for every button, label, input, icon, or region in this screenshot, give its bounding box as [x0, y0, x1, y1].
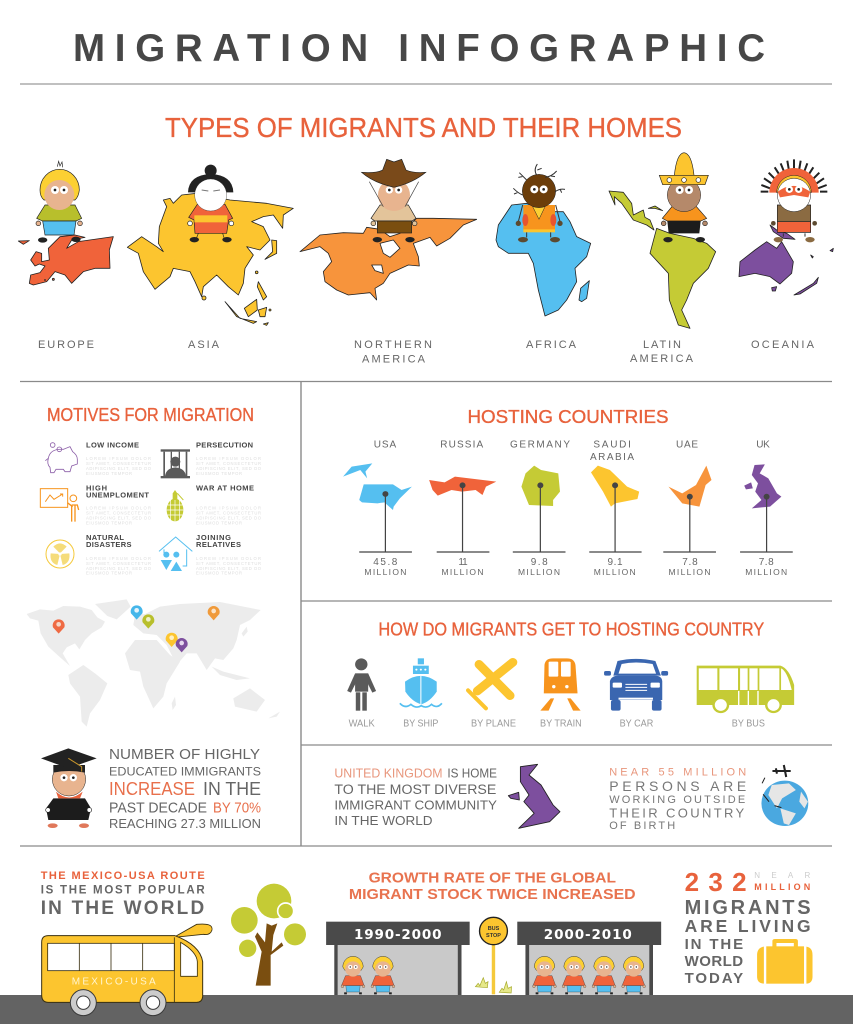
transport labels: BY SHIP: [403, 719, 439, 730]
continent labels: AFRICA: [526, 339, 577, 351]
text: high unemployment: ADIPISCING ELIT, SED DO: [86, 516, 152, 520]
heading: growth rate: [349, 869, 636, 903]
text: migrants living: [685, 897, 811, 987]
continent labels: EUROPE: [38, 339, 94, 351]
values: MILLION: [364, 567, 406, 577]
country labels: [374, 440, 770, 463]
text: low income: [86, 441, 152, 476]
text: joining relatives: EIUSMOD TEMPOR: [196, 570, 242, 576]
icon: train: [540, 658, 581, 711]
icon: unemployment chart: [40, 489, 79, 522]
character: Asian woman: [188, 165, 234, 242]
text: joining relatives: RELATIVES: [196, 540, 241, 549]
icon: grenade: [167, 490, 183, 521]
text: 55 million: PERSONS ARE: [609, 778, 746, 794]
continent labels: AMERICA: [630, 353, 694, 365]
panel: how migrants travel: [347, 620, 794, 730]
heading: growth rate: GROWTH RATE OF THE GLOBAL: [369, 869, 616, 886]
map: Africa: [496, 203, 591, 316]
text: UK diverse community: IN THE WORLD: [334, 813, 433, 828]
transport labels: WALK: [349, 719, 375, 730]
text: natural disasters: LOREM IPSUM DOLOR: [86, 556, 151, 561]
text: UK diverse community: UNITED KINGDOM: [334, 765, 443, 780]
world map: [27, 599, 280, 727]
heading: types of migrants: TYPES OF MIGRANTS AND THEIR HOMES: [165, 112, 682, 143]
Russia map: [429, 477, 496, 496]
text: route: IN THE WORLD: [41, 898, 204, 919]
text: joining relatives: ADIPISCING ELIT, SED DO: [196, 566, 262, 571]
country labels: UAE: [676, 440, 698, 451]
text: low income: LOW INCOME: [86, 441, 139, 450]
text: 55 million: [609, 767, 746, 832]
shelter labels: [354, 927, 632, 943]
text: highly educated: EDUCATED IMMIGRANTS: [109, 764, 261, 778]
country labels: SAUDI: [593, 440, 631, 451]
character: African man: [513, 164, 565, 242]
text: migrants living: TODAY: [685, 970, 743, 987]
USA map: [343, 463, 412, 510]
values: 7.8: [682, 557, 698, 568]
panel: 232 million: [685, 867, 813, 987]
panel: types of migrants: [18, 112, 833, 366]
map: Northern America: [300, 218, 477, 300]
panel: motives for migration: [40, 404, 262, 576]
shelter labels: 1990-2000: [354, 927, 442, 943]
transport labels: BY PLANE: [471, 719, 516, 730]
number: 232: 232: [685, 867, 747, 897]
text: persecution: ADIPISCING ELIT, SED DO: [196, 466, 262, 471]
map: Oceania: [739, 225, 833, 295]
text: persecution: PERSECUTION: [196, 441, 253, 450]
text: persecution: [196, 441, 262, 476]
text: natural disasters: [86, 533, 152, 576]
heading: hosting countries: HOSTING COUNTRIES: [468, 406, 668, 427]
character: graduate: [41, 748, 97, 828]
icon: ship: [400, 658, 442, 707]
map: Latin America: [609, 191, 716, 328]
country labels: USA: [374, 440, 397, 451]
text: near million: MILLION: [754, 882, 810, 892]
text: route: [41, 870, 205, 919]
values: 45.8: [373, 557, 398, 568]
character: cowboy: [362, 159, 426, 242]
shelter labels: 2000-2010: [544, 927, 632, 943]
text: 55 million: WORKING OUTSIDE: [609, 794, 745, 806]
country labels: GERMANY: [510, 440, 570, 451]
bus stop text: STOP: [486, 933, 501, 939]
icon: bus: [697, 666, 794, 712]
Germany map: [521, 466, 560, 506]
bus shelter 2000-2010: [517, 922, 661, 995]
country maps and stems: [343, 463, 793, 552]
icon: suitcase: [757, 939, 813, 984]
values: MILLION: [442, 567, 484, 577]
values: MILLION: [668, 567, 710, 577]
text: war at home: EIUSMOD TEMPOR: [196, 520, 242, 526]
text: war at home: LOREM IPSUM DOLOR: [196, 506, 261, 510]
bus text: MEXICO-USA: [72, 976, 156, 987]
text: highly educated: [109, 746, 261, 831]
values: 7.8: [759, 557, 774, 568]
icon: biohazard: [46, 540, 74, 568]
Saudi Arabia map: [591, 466, 639, 507]
bus stop text: BUS: [488, 926, 500, 932]
text: joining relatives: LOREM IPSUM DOLOR: [196, 556, 261, 561]
UK map: [744, 464, 781, 508]
values: 11: [458, 557, 468, 568]
icon: persecution: [161, 449, 190, 478]
continent labels: LATIN: [643, 339, 681, 351]
heading: transport: HOW DO MIGRANTS GET TO HOSTING COUNTRY: [378, 620, 764, 640]
continent labels: ASIA: [188, 339, 220, 351]
icon: joining relatives house: [159, 537, 192, 571]
heading: motives: MOTIVES FOR MIGRATION: [47, 404, 254, 425]
text: joining relatives: SIT AMET, CONSECTETUR: [196, 561, 261, 566]
text: highly educated: REACHING 27.3 MILLION: [109, 816, 261, 831]
text: near million: [754, 871, 811, 892]
character: Europe boy: [36, 161, 82, 243]
text: persecution: EIUSMOD TEMPOR: [196, 471, 242, 476]
road: [0, 995, 853, 1024]
icon: plane: [468, 662, 513, 708]
text: high unemployment: HIGH: [86, 484, 107, 493]
panel: Mexico-USA route: [41, 870, 306, 1016]
text: 55 million: NEAR 55 MILLION: [609, 767, 746, 779]
icon: piggy bank: [45, 443, 77, 473]
text: persecution: LOREM IPSUM DOLOR: [196, 456, 261, 461]
continent labels: AMERICA: [362, 354, 426, 366]
text: 55 million: OF BIRTH: [609, 820, 675, 832]
text: high unemployment: [86, 484, 152, 526]
stems: [359, 483, 793, 552]
icon: walk: [347, 658, 376, 711]
text: high unemployment: EIUSMOD TEMPOR: [86, 520, 132, 526]
pins: [53, 605, 220, 652]
character: Papuan man: [761, 159, 827, 242]
text: war at home: WAR AT HOME: [196, 484, 254, 493]
text: low income: EIUSMOD TEMPOR: [86, 471, 132, 476]
text: low income: ADIPISCING ELIT, SED DO: [86, 466, 152, 471]
text: migrants living: MIGRANTS: [685, 897, 811, 919]
text: joining relatives: [196, 533, 262, 576]
continent labels: OCEANIA: [751, 339, 815, 351]
text: natural disasters: ADIPISCING ELIT, SED DO: [86, 566, 152, 571]
text: highly educated: IN THE: [203, 778, 261, 799]
text: near million: NEAR: [754, 871, 811, 880]
bus stop text: [486, 926, 501, 939]
text: highly educated: BY 70%: [213, 801, 261, 817]
map: Europe: [18, 235, 113, 285]
text: natural disasters: EIUSMOD TEMPOR: [86, 570, 132, 576]
panel: hosting countries: [343, 406, 793, 577]
text: high unemployment: UNEMPLOMENT: [86, 491, 149, 500]
text: persecution: SIT AMET, CONSECTETUR: [196, 461, 261, 466]
country labels: RUSSIA: [440, 440, 484, 451]
text: UK diverse community: IMMIGRANT COMMUNITY: [334, 798, 497, 813]
values: 9.1: [608, 557, 623, 568]
panel: world map with pins: [27, 599, 280, 727]
panel: 55 million working abroad: [609, 765, 808, 832]
transport labels: BY TRAIN: [540, 719, 582, 730]
continent labels: [38, 339, 815, 366]
map: Asia: [127, 193, 293, 325]
transport labels: [349, 719, 765, 730]
text: high unemployment: LOREM IPSUM DOLOR: [86, 506, 151, 510]
values: 9.8: [531, 557, 548, 568]
UAE map: [668, 466, 711, 507]
text: migrants living: IN THE: [685, 936, 743, 953]
values: MILLION: [594, 567, 636, 577]
text: war at home: [196, 484, 262, 526]
text: war at home: ADIPISCING ELIT, SED DO: [196, 516, 262, 520]
text: migrants living: ARE LIVING: [685, 916, 811, 936]
text: 55 million: THEIR COUNTRY: [609, 806, 745, 821]
panel: educated immigrants: [41, 746, 261, 831]
icon: tree: [231, 884, 306, 986]
text: natural disasters: DISASTERS: [86, 540, 132, 549]
icon: globe and plane: [761, 765, 808, 826]
text: joining relatives: JOINING: [196, 533, 231, 542]
text: UK diverse community: TO THE MOST DIVERSE: [334, 782, 496, 797]
panel: United Kingdom fact: [334, 764, 560, 828]
values: MILLION: [745, 567, 787, 577]
text: migrants living: WORLD: [685, 953, 743, 970]
text: war at home: SIT AMET, CONSECTETUR: [196, 510, 261, 516]
text: high unemployment: SIT AMET, CONSECTETUR: [86, 510, 151, 516]
continent labels: NORTHERN: [354, 339, 432, 351]
text: natural disasters: NATURAL: [86, 533, 124, 542]
text: UK diverse community: [334, 765, 497, 828]
text: UK diverse community: IS HOME: [447, 765, 497, 780]
country labels: UK: [756, 440, 770, 451]
text: route: THE MEXICO-USA ROUTE: [41, 870, 205, 882]
text: low income: LOREM IPSUM DOLOR: [86, 456, 151, 461]
text: route: IS THE MOST POPULAR: [41, 884, 205, 896]
bus shelter 1990-2000: [326, 922, 470, 995]
transport labels: BY BUS: [732, 719, 765, 730]
bus stop sign: [475, 917, 511, 994]
icon: yellow bus: [42, 924, 212, 1016]
text: highly educated: NUMBER OF HIGHLY: [109, 746, 260, 763]
values: MILLION: [518, 567, 560, 577]
icon: UK map: [508, 764, 560, 828]
panel: growth rate: [326, 869, 661, 995]
heading: growth rate: MIGRANT STOCK TWICE INCREASED: [349, 886, 636, 903]
text: low income: SIT AMET, CONSECTETUR: [86, 461, 151, 466]
values: [364, 557, 787, 577]
transport labels: BY CAR: [620, 719, 653, 730]
text: highly educated: INCREASE: [109, 778, 195, 799]
text: highly educated: PAST DECADE: [109, 801, 207, 817]
icon: car: [604, 659, 668, 711]
country labels: ARABIA: [590, 452, 634, 463]
title: MIGRATION INFOGRAPHIC: [73, 27, 765, 70]
character: Mexican man: [659, 153, 708, 242]
text: natural disasters: SIT AMET, CONSECTETUR: [86, 561, 151, 566]
